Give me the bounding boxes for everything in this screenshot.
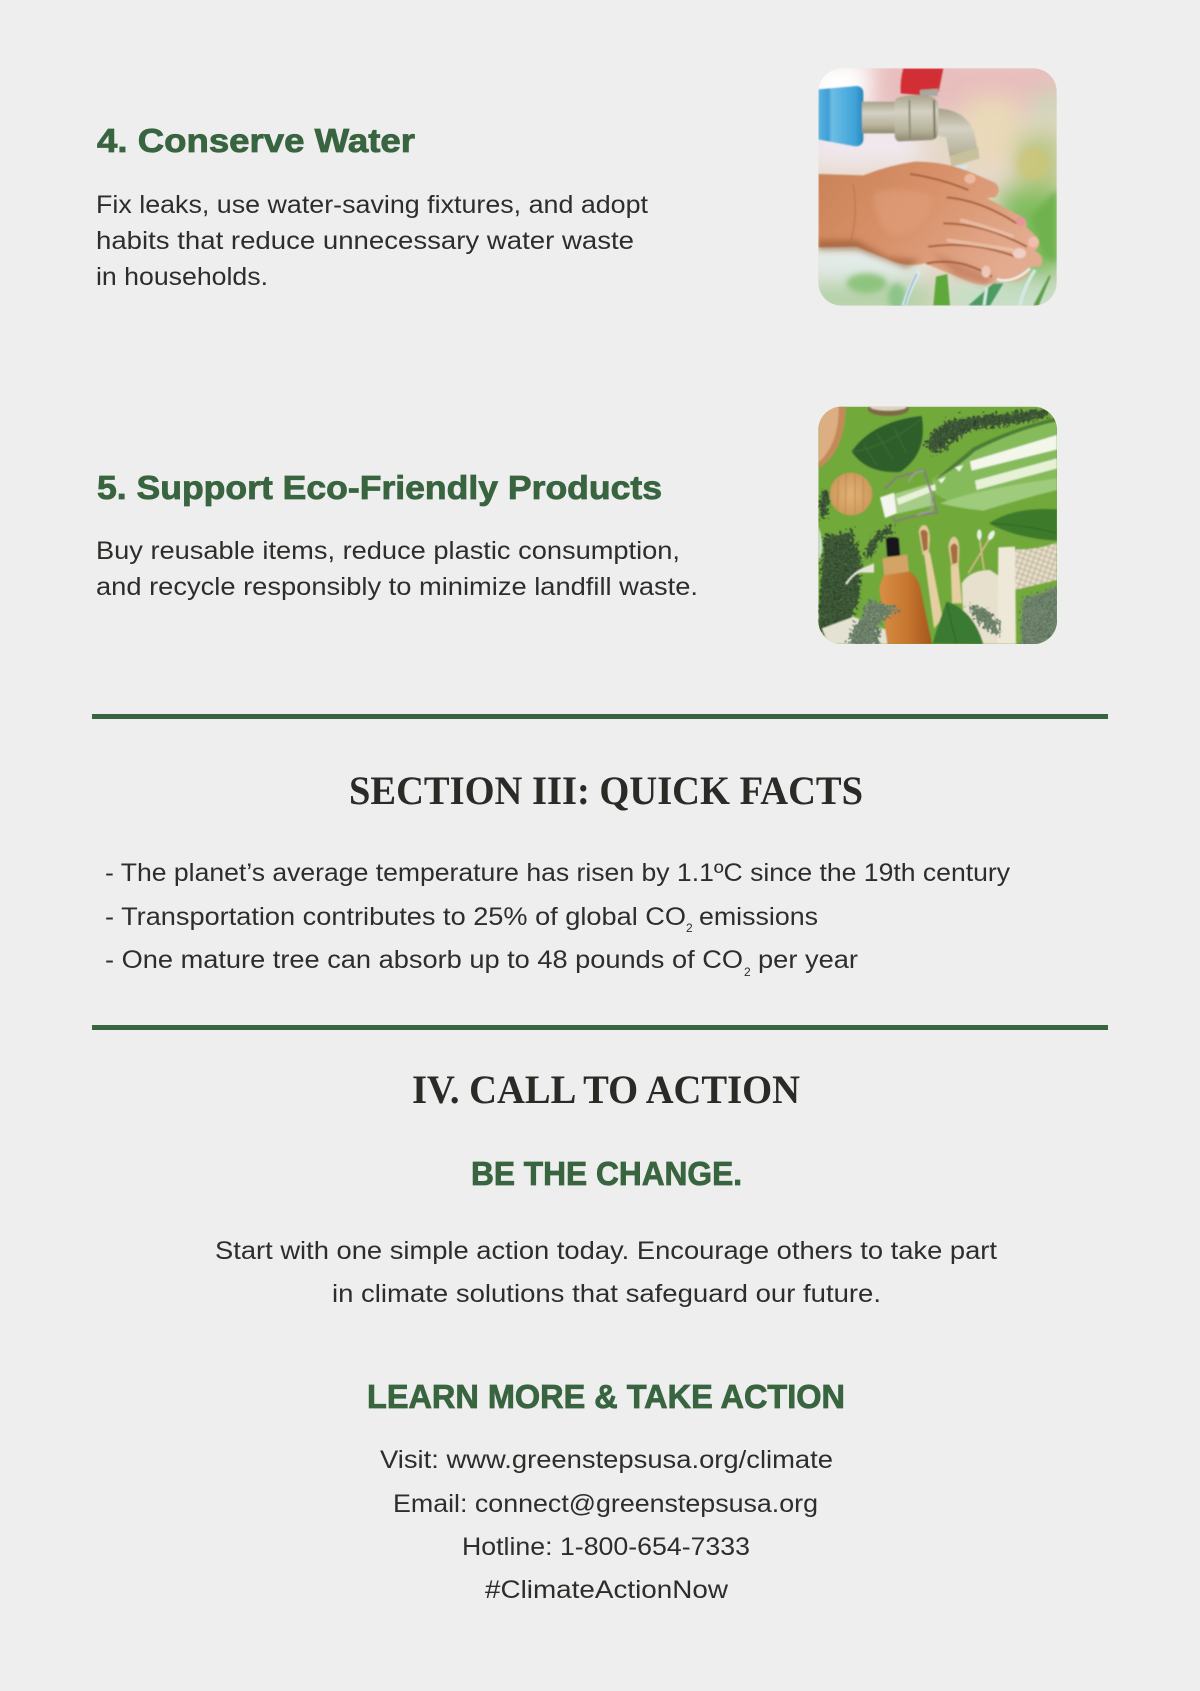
page canvas — [92, 68, 1108, 1598]
fact: transportation: 2 — [686, 921, 693, 935]
text block: eco products description: Buy reusable items, reduce plastic consumption, — [96, 537, 680, 565]
heading: 4. Conserve Water: 4. Conserve Water — [97, 122, 415, 159]
herbs over the bag — [844, 584, 1057, 644]
water — [904, 271, 919, 306]
fact: temperature: - The planet’s average temperature has risen by 1.1ºC since the 19th century — [105, 859, 1011, 887]
text block: call to action message: in climate solutions that safeguard our future. — [332, 1280, 881, 1308]
cotton buds — [967, 538, 990, 574]
contact details: Visit: www.greenstepsusa.org/climate — [380, 1446, 833, 1474]
heading: Section III Quick Facts: SECTION III: QUICK FACTS — [349, 768, 863, 813]
photo: eco-friendly products on green background — [813, 403, 1063, 647]
right leaf — [989, 509, 1057, 541]
item 4: conserve water — [96, 122, 648, 291]
evergreen sprigs — [813, 405, 1047, 630]
bottom-left cloth — [822, 617, 888, 644]
contact details: Hotline: 1-800-654-7333 — [462, 1533, 750, 1561]
text block: eco products description — [96, 537, 698, 601]
fact list — [105, 859, 1011, 979]
subheading: Learn more and take action: LEARN MORE & TAKE ACTION — [367, 1378, 845, 1415]
heading: 5. Support Eco-Friendly Products: 5. Support Eco-Friendly Products — [97, 469, 662, 506]
bottle — [932, 417, 1057, 511]
text block: conserve water description: Fix leaks, use water-saving fixtures, and adopt — [96, 191, 648, 219]
contact details — [380, 1446, 833, 1604]
fact: transportation: emissions — [699, 903, 818, 931]
contact details: #ClimateActionNow — [485, 1576, 729, 1604]
pipe — [818, 86, 863, 146]
text block: conserve water description: in households. — [96, 263, 268, 291]
big leaf — [852, 416, 923, 472]
fact: trees: 2 — [744, 965, 751, 979]
item 5: support eco-friendly products — [96, 469, 698, 601]
text block: conserve water description — [96, 191, 648, 291]
text block: conserve water description: habits that reduce unnecessary water waste — [96, 227, 634, 255]
cotton bag — [962, 570, 1000, 644]
text block: eco products description: and recycle responsibly to minimize landfill waste. — [96, 573, 698, 601]
section IV: call to action — [215, 1067, 997, 1604]
divider: top of quick facts — [92, 714, 1108, 719]
amber bottle — [886, 537, 900, 557]
hand — [818, 162, 1042, 285]
photo: hands washing under a tap — [807, 57, 1070, 313]
center leaf — [933, 602, 983, 644]
heading: IV. Call to Action: IV. CALL TO ACTION — [412, 1067, 800, 1112]
section III: quick facts — [105, 768, 1011, 979]
fact: trees: per year — [758, 946, 858, 974]
bamboo toothbrushes — [924, 553, 943, 628]
text block: call to action message — [215, 1237, 997, 1308]
divider: top of call to action — [92, 1025, 1108, 1030]
contact details: Email: connect@greenstepsusa.org — [393, 1490, 818, 1518]
fact: trees: - One mature tree can absorb up to 48 pounds of CO — [105, 946, 743, 974]
bottle neck and cage — [894, 483, 935, 514]
wooden lid — [830, 473, 872, 515]
fact: trees — [105, 946, 858, 979]
text block: call to action message: Start with one simple action today. Encourage others to take part — [215, 1237, 997, 1265]
subheading: Be the change: BE THE CHANGE. — [471, 1155, 742, 1192]
fact: transportation: - Transportation contributes to 25% of global CO — [105, 903, 686, 931]
fact: transportation — [105, 903, 818, 935]
